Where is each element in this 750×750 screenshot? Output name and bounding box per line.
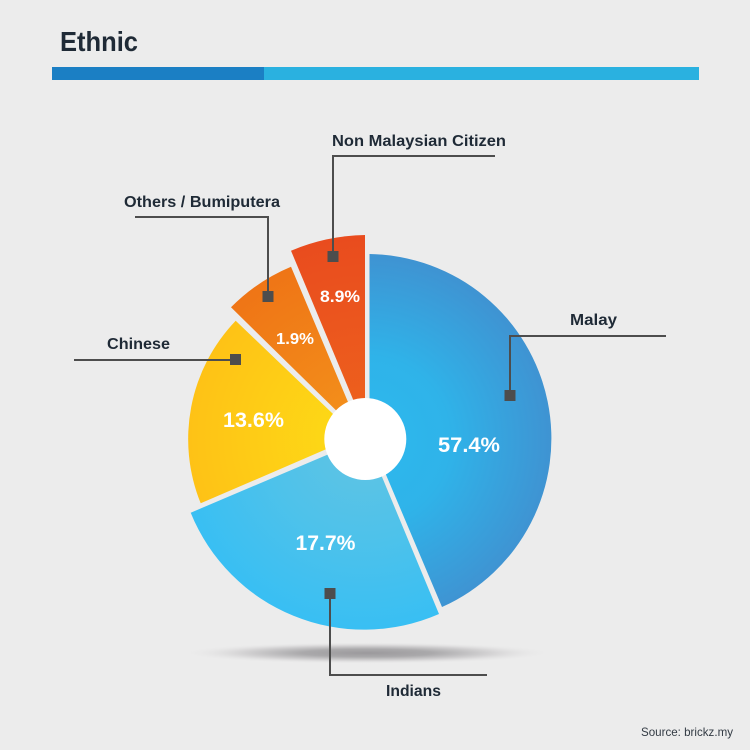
label: Non Malaysian Citizen: Non Malaysian Citizen [332, 133, 506, 150]
pie chart [188, 235, 551, 630]
centre hole [324, 398, 406, 480]
leader: Non Malaysian Citizen [328, 156, 495, 262]
slice: Non Malaysian Citizen 8.9% [291, 235, 365, 420]
slice: Malay 57.4% [370, 254, 551, 607]
source note: Source: brickz.my [641, 725, 733, 739]
value: Indians: 17.7% [296, 532, 356, 555]
slice: Others / Bumiputera 1.9% [231, 267, 352, 419]
label: Others / Bumiputera: Others / Bumiputera [124, 194, 280, 211]
value: Chinese: 13.6% [223, 409, 284, 432]
leader: Others / Bumiputera [135, 217, 274, 302]
pie shadow [181, 642, 553, 664]
header progress bar [52, 67, 699, 80]
slice: Chinese 13.6% [188, 321, 345, 503]
value: Others / Bumiputera: 1.9% [276, 331, 314, 348]
label: Chinese: Chinese [107, 336, 170, 353]
leader: Malay [504, 336, 666, 401]
leader: Indians [324, 588, 487, 675]
title: Ethnic [60, 26, 138, 57]
label: Indians: Indians [386, 683, 441, 700]
value: Non Malaysian Citizen: 8.9% [320, 287, 360, 306]
label: Malay: Malay [570, 312, 617, 329]
leader: Chinese [74, 354, 241, 365]
slice: Indians 17.7% [191, 447, 439, 630]
value: Malay: 57.4% [438, 434, 500, 457]
